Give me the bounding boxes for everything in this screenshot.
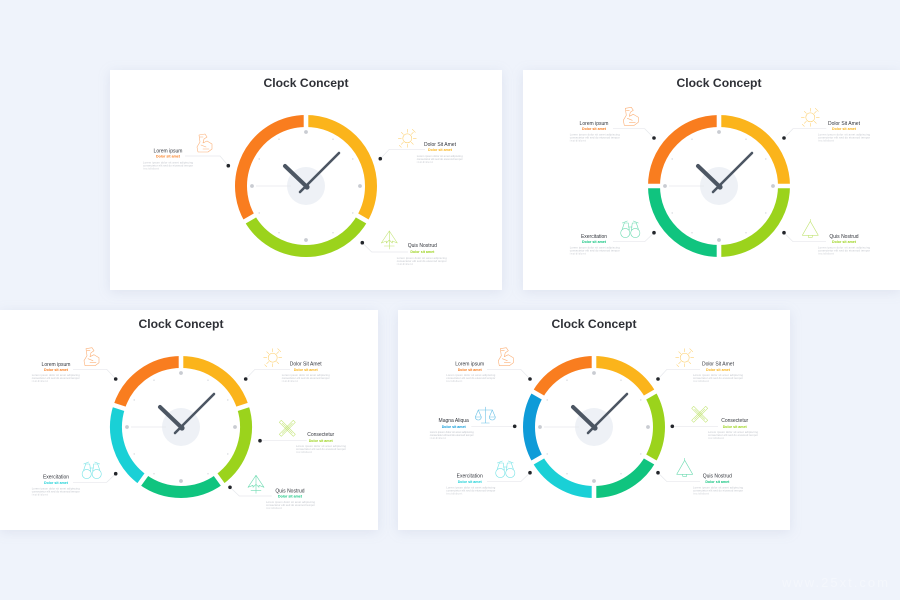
callout: lorem ipsum: consectetur elit sed do eiusmod tempor: [446, 376, 495, 380]
callout: quis nostrud: Dolor sit amet: [278, 494, 303, 498]
callout: exercitation: Lorem ipsum dolor sit amet adipiscing: [32, 486, 80, 490]
callout: lorem ipsum: Lorem ipsum: [42, 362, 70, 368]
callout: exercitation: Dolor sit amet: [458, 480, 482, 484]
callout: dolor sit amet: consectetur elit sed do eiusmod tempor: [818, 136, 870, 140]
callout: exercitation: [570, 221, 656, 256]
callout: dolor sit amet: Lorem ipsum dolor sit amet adipiscing: [818, 132, 870, 136]
callout: lorem ipsum: incididunt: [446, 379, 463, 383]
callout: lorem ipsum: incididunt: [570, 138, 586, 142]
heading: Clock Concept: [138, 318, 224, 331]
callout: dolor sit amet: Lorem ipsum dolor sit amet adipiscing: [282, 373, 330, 377]
callout: lorem ipsum: consectetur elit sed do eiusmod tempor: [570, 136, 620, 140]
callout: dolor sit amet: Dolor Sit Amet: [424, 142, 457, 148]
clock face and hands: [663, 130, 775, 242]
callout: quis nostrud: Quis Nostrud: [703, 474, 732, 480]
callout: quis nostrud: Quis Nostrud: [408, 243, 437, 249]
callout: quis nostrud: consectetur elit sed do eiusmod tempor: [397, 259, 447, 263]
clock face and hands: [125, 371, 237, 483]
callout: lorem ipsum: incididunt: [143, 166, 159, 170]
callout: quis nostrud: Quis Nostrud: [275, 488, 305, 494]
callout: exercitation: Exercitation: [457, 474, 483, 480]
heading: Clock Concept: [552, 318, 637, 331]
callout: dolor sit amet: [782, 108, 870, 142]
callout: lorem ipsum: Lorem ipsum dolor sit amet adipiscing: [446, 373, 496, 377]
callout: quis nostrud: consectetur elit sed do eiusmod tempor: [266, 503, 315, 507]
panel: four-segment clock: [523, 70, 900, 290]
callout: quis nostrud: Lorem ipsum dolor sit amet adipiscing: [266, 500, 316, 504]
callout: exercitation: Exercitation: [43, 474, 69, 480]
callout: consectetur: incididunt: [296, 450, 312, 454]
callout: quis nostrud: consectetur elit sed do eiusmod tempor: [818, 248, 870, 252]
callout: magna aliqua: Magna Aliqua: [439, 418, 469, 424]
callout: dolor sit amet: consectetur elit sed do eiusmod tempor: [693, 376, 743, 380]
callout: dolor sit amet: Lorem ipsum dolor sit amet adipiscing: [417, 154, 463, 158]
callout: quis nostrud: incididunt: [818, 252, 834, 256]
callout: lorem ipsum: Dolor sit amet: [582, 127, 607, 131]
callout: exercitation: incididunt: [570, 252, 586, 256]
callout: consectetur: Consectetur: [307, 432, 335, 438]
callout: quis nostrud: [360, 231, 447, 266]
callout: dolor sit amet: incididunt: [818, 138, 834, 142]
clock ring: [644, 111, 794, 261]
callout: quis nostrud: Dolor sit amet: [832, 240, 857, 244]
callout: consectetur: consectetur elit sed do eiusmod tempor: [296, 447, 346, 451]
callout: consectetur: Lorem ipsum dolor sit amet adipiscing: [296, 444, 346, 448]
callout: magna aliqua: Lorem ipsum dolor sit amet adipiscing: [430, 430, 474, 434]
callout: quis nostrud: [228, 475, 316, 510]
callout: exercitation: Exercitation: [581, 234, 607, 240]
callout: quis nostrud: Lorem ipsum dolor sit amet adipiscing: [397, 256, 447, 260]
callout: exercitation: [32, 462, 118, 496]
clock ring: [217, 97, 395, 275]
callout: lorem ipsum: Lorem ipsum: [455, 362, 484, 368]
callout: consectetur: [670, 406, 758, 440]
callout: consectetur: Dolor sit amet: [723, 425, 747, 429]
callout: exercitation: Dolor sit amet: [44, 481, 69, 485]
callout: dolor sit amet: Dolor sit amet: [832, 127, 857, 131]
callout: quis nostrud: Dolor sit amet: [705, 480, 730, 484]
callout: dolor sit amet: [378, 129, 463, 164]
callout: dolor sit amet: Dolor sit amet: [428, 148, 453, 152]
callout: quis nostrud: incididunt: [693, 492, 709, 496]
callout: lorem ipsum: [570, 107, 656, 142]
callout: consectetur: consectetur elit sed do eiusmod tempor: [708, 433, 758, 437]
heading: Clock Concept: [676, 77, 762, 90]
callout: lorem ipsum: consectetur elit sed do eiusmod tempor: [143, 164, 193, 168]
callout: lorem ipsum: [446, 348, 532, 383]
callout: dolor sit amet: incididunt: [417, 160, 433, 164]
watermark: www.25xt.com: [781, 575, 888, 590]
callout: dolor sit amet: consectetur elit sed do eiusmod tempor: [417, 157, 463, 161]
callout: quis nostrud: [656, 458, 744, 496]
callout: dolor sit amet: Dolor sit amet: [294, 368, 318, 372]
callout: exercitation: consectetur elit sed do eiusmod tempor: [446, 488, 495, 492]
callout: consectetur: Dolor sit amet: [309, 439, 333, 443]
callout: exercitation: consectetur elit sed do eiusmod tempor: [570, 248, 620, 252]
callout: lorem ipsum: [32, 348, 118, 383]
callout: dolor sit amet: incididunt: [693, 379, 709, 383]
callout: lorem ipsum: Dolor sit amet: [44, 368, 69, 372]
clock face and hands: [538, 371, 650, 483]
callout: lorem ipsum: [143, 134, 230, 170]
callout: lorem ipsum: incididunt: [32, 379, 48, 383]
callout: consectetur: Consectetur: [721, 418, 749, 424]
clock ring: [505, 338, 683, 516]
panel: three-segment clock: [110, 70, 502, 290]
callout: dolor sit amet: [244, 349, 330, 383]
callout: lorem ipsum: consectetur elit sed do eiusmod tempor: [32, 376, 80, 380]
callout: dolor sit amet: consectetur elit sed do eiusmod tempor: [282, 376, 330, 380]
callout: magna aliqua: [430, 407, 516, 440]
callout: lorem ipsum: Lorem ipsum dolor sit amet adipiscing: [570, 132, 620, 136]
callout: exercitation: consectetur elit sed do eiusmod tempor: [32, 490, 80, 494]
callout: consectetur: incididunt: [708, 436, 724, 440]
callout: quis nostrud: consectetur elit sed do eiusmod tempor: [693, 488, 743, 492]
panel: five-segment clock: [0, 310, 378, 530]
callout: dolor sit amet: Dolor Sit Amet: [290, 362, 322, 368]
callout: quis nostrud: incididunt: [266, 506, 282, 510]
callout: lorem ipsum: Lorem ipsum dolor sit amet adipiscing: [32, 373, 80, 377]
panel: six-segment clock: [398, 310, 790, 530]
callout: dolor sit amet: Lorem ipsum dolor sit amet adipiscing: [693, 373, 744, 377]
callout: quis nostrud: Dolor sit amet: [410, 250, 435, 254]
clock face and hands: [250, 130, 362, 242]
callout: exercitation: Lorem ipsum dolor sit amet adipiscing: [446, 486, 496, 490]
callout: dolor sit amet: [656, 349, 744, 383]
callout: magna aliqua: Dolor sit amet: [442, 425, 466, 429]
callout: dolor sit amet: Dolor Sit Amet: [828, 121, 861, 127]
callout: dolor sit amet: incididunt: [282, 379, 298, 383]
callout: magna aliqua: consectetur elit sed do eiusmod tempor: [430, 433, 474, 437]
callout: quis nostrud: Lorem ipsum dolor sit amet adipiscing: [693, 486, 744, 490]
callout: consectetur: [258, 420, 346, 454]
callout: quis nostrud: [782, 219, 870, 256]
callout: lorem ipsum: Dolor sit amet: [458, 368, 482, 372]
callout: magna aliqua: incididunt: [430, 436, 446, 440]
callout: quis nostrud: Quis Nostrud: [829, 234, 859, 240]
callout: exercitation: incididunt: [32, 492, 48, 496]
callout: exercitation: Dolor sit amet: [582, 240, 607, 244]
callout: quis nostrud: incididunt: [397, 262, 413, 266]
clock ring: [90, 336, 272, 518]
callout: exercitation: incididunt: [446, 492, 463, 496]
callout: dolor sit amet: Dolor sit amet: [706, 368, 731, 372]
heading: Clock Concept: [264, 77, 349, 90]
callout: lorem ipsum: Lorem ipsum dolor sit amet adipiscing: [143, 160, 194, 164]
callout: dolor sit amet: Dolor Sit Amet: [702, 362, 735, 368]
callout: consectetur: Lorem ipsum dolor sit amet adipiscing: [708, 430, 758, 434]
callout: lorem ipsum: Lorem ipsum: [154, 148, 182, 154]
callout: lorem ipsum: Dolor sit amet: [156, 154, 181, 158]
callout: exercitation: Lorem ipsum dolor sit amet adipiscing: [570, 246, 620, 250]
callout: lorem ipsum: Lorem ipsum: [580, 121, 608, 127]
callout: quis nostrud: Lorem ipsum dolor sit amet adipiscing: [818, 246, 870, 250]
callout: exercitation: [446, 461, 532, 496]
